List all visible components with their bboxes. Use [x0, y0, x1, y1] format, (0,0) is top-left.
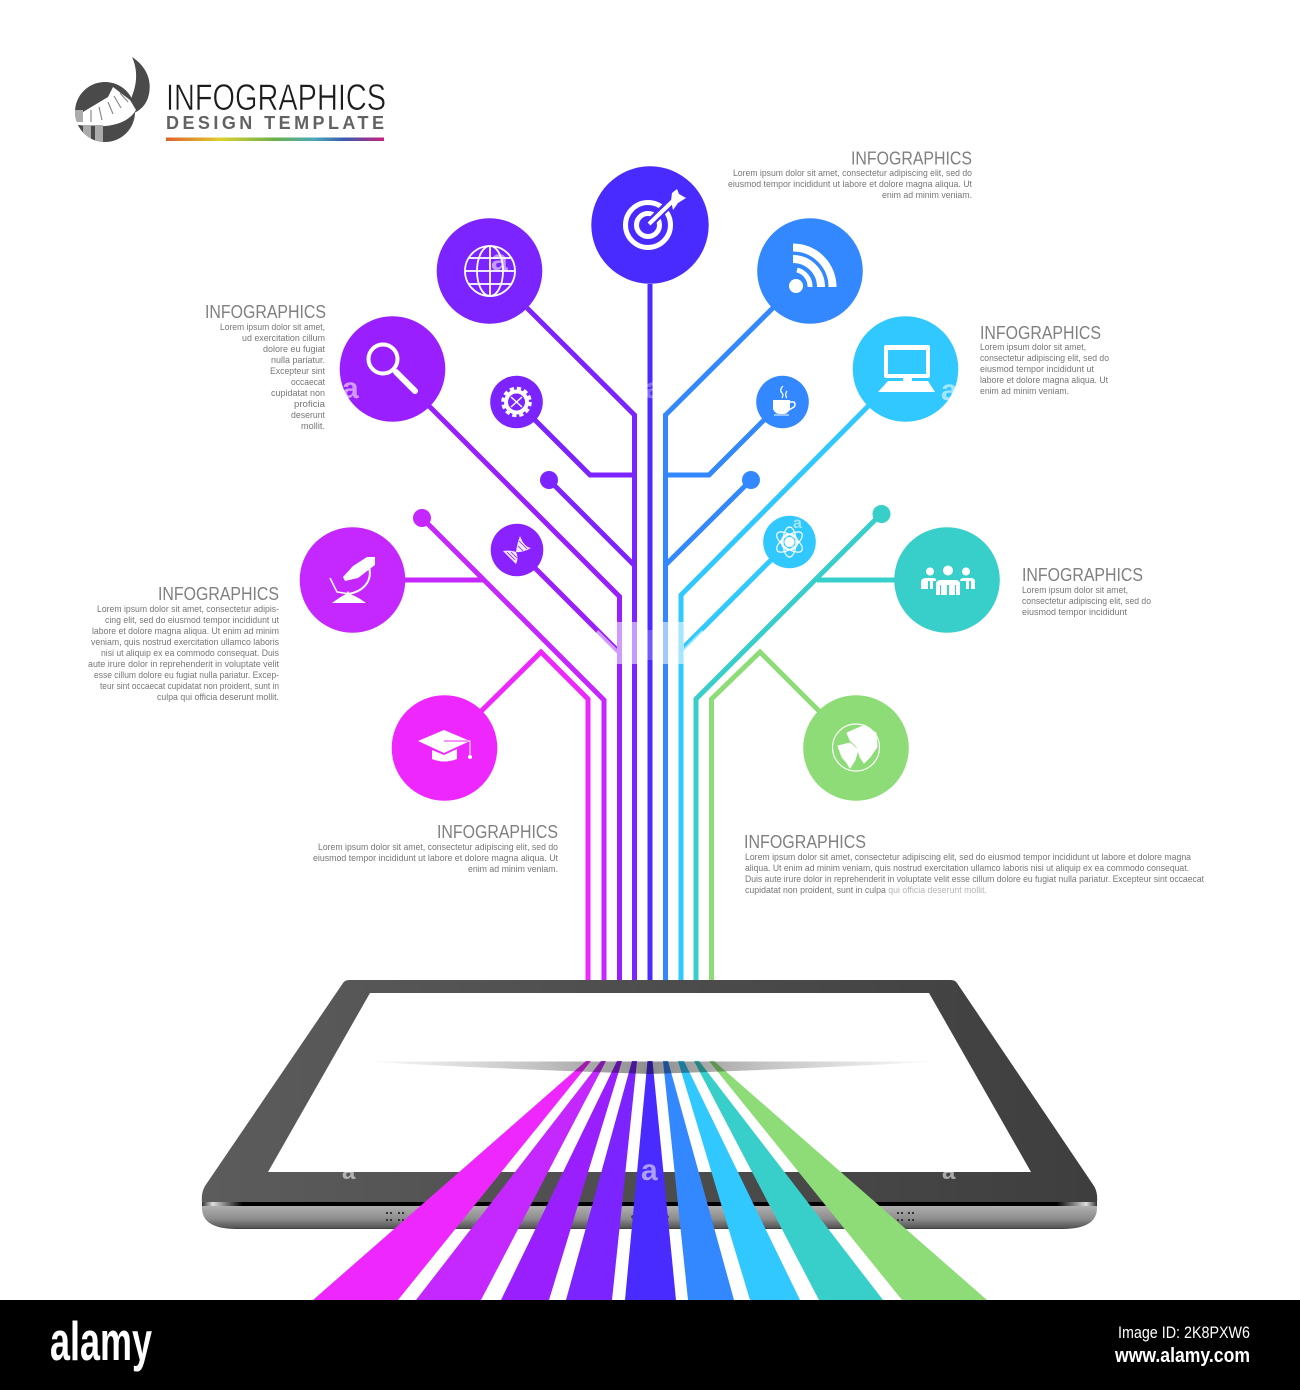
- icon: atom: [773, 527, 806, 557]
- dot: blue endpoint: [742, 471, 760, 489]
- text block: upper left: proficia: [294, 399, 326, 410]
- tablet bezel: [202, 980, 1097, 1202]
- node: target: [591, 166, 709, 284]
- node: earth: [803, 695, 909, 801]
- text block: lower right: Duis aute irure dolor in reprehenderit in voluptate velit esse cillum dolore eu fugiat nulla pariatur. Excepteur sint occaecat: [745, 874, 1204, 885]
- text block: lower right: Lorem ipsum dolor sit amet, consectetur adipiscing elit, sed do eiusmod tempor incididunt ut labore et dolore magna: [745, 852, 1192, 863]
- text block: upper left: mollit.: [301, 421, 325, 432]
- text block: lower right: cupidatat non proident, sunt in culpa qui officia deserunt mollit.: [745, 885, 987, 896]
- tablet screen: [268, 993, 1031, 1172]
- text block: middle right: [1022, 565, 1151, 618]
- icon: microscope: [330, 557, 375, 603]
- text block: top right: enim ad minim veniam.: [882, 190, 972, 201]
- text block: upper left: cupidatat non: [271, 388, 325, 399]
- watermark letters: a: [942, 1158, 956, 1185]
- dot: magenta endpoint: [413, 509, 431, 527]
- text block: upper left: INFOGRAPHICS: [205, 302, 326, 322]
- icon: target with arrow: [626, 189, 686, 248]
- logo subtitle: DESIGN TEMPLATE: [166, 113, 384, 133]
- icon: earth: [832, 724, 880, 771]
- text block: upper left: nulla pariatur.: [271, 355, 325, 366]
- text block: upper right: enim ad minim veniam.: [980, 386, 1069, 397]
- text block: middle left: aute irure dolor in reprehenderit in voluptate velit: [88, 659, 279, 670]
- icon: computer: [878, 345, 935, 392]
- node: globe grid: [437, 218, 542, 324]
- text block: lower left: INFOGRAPHICS: [437, 822, 558, 842]
- text block: upper left: deserunt: [291, 410, 325, 421]
- text block: upper left: Lorem ipsum dolor sit amet,: [220, 322, 325, 333]
- dot: violet endpoint: [540, 471, 558, 489]
- watermark letters: a: [645, 372, 662, 405]
- text block: top right: Lorem ipsum dolor sit amet, consectetur adipiscing elit, sed do: [733, 168, 972, 179]
- speaker dots: [386, 1212, 914, 1221]
- node: graduation: [392, 695, 497, 801]
- text block: top right: [728, 148, 972, 201]
- footer bar: [0, 1300, 1300, 1390]
- text block: middle left: nisi ut aliquip ex ea commodo consequat. Duis: [101, 648, 279, 659]
- text block: middle left: culpa qui officia deserunt mollit.: [157, 692, 279, 703]
- text block: lower left: eiusmod tempor incididunt ut labore et dolore magna aliqua. Ut: [313, 853, 558, 864]
- text block: middle left: [88, 584, 279, 703]
- tablet: [202, 980, 1097, 1229]
- icon: magnifier: [368, 344, 415, 391]
- tablet side edge: [202, 1204, 1097, 1229]
- icon: rss feed: [789, 248, 832, 293]
- text block: top right: eiusmod tempor incididunt ut labore et dolore magna aliqua. Ut: [728, 179, 972, 190]
- watermark letters: a: [491, 244, 508, 277]
- node: gear: [490, 376, 543, 428]
- text block: lower right: aliqua. Ut enim ad minim veniam, quis nostrud exercitation ullamco laboris nisi ut aliquip ex ea commodo consequat.: [745, 863, 1189, 874]
- text block: upper right: Lorem ipsum dolor sit amet,: [980, 342, 1086, 353]
- node: monitor: [853, 316, 958, 422]
- text block: upper right: consectetur adipiscing elit, sed do: [980, 353, 1109, 364]
- text block: middle left: teur sint occaecat cupidatat non proident, sunt in: [100, 681, 279, 692]
- text block: lower right: [744, 832, 1204, 896]
- perspective colour rays: [313, 1061, 987, 1300]
- text block: upper left: dolore eu fugiat: [263, 344, 325, 355]
- dot: teal endpoint: [872, 505, 890, 523]
- footer logo: alamy: [50, 1310, 152, 1372]
- watermark letters: a: [641, 1154, 658, 1187]
- text block: middle left: esse cillum dolore eu fugiat nulla pariatur. Excep-: [94, 670, 279, 681]
- text block: middle left: labore et dolore magna aliqua. Ut enim ad minim: [92, 626, 279, 637]
- icon: coffee cup: [773, 386, 795, 416]
- node: dna: [491, 524, 543, 576]
- circuit tree lines: [352, 271, 947, 980]
- icon: wireframe globe: [465, 246, 515, 296]
- watermark letters: a: [941, 374, 958, 407]
- text block: middle left: veniam, quis nostrud exercitation ullamco laboris: [91, 637, 279, 648]
- icon: people: [921, 566, 975, 595]
- text block: top right: INFOGRAPHICS: [851, 148, 972, 168]
- logo title: INFOGRAPHICS: [166, 77, 386, 118]
- watermark letters: a: [793, 515, 802, 532]
- image id: Image ID: 2K8PXW6: [1118, 1323, 1250, 1342]
- text block: lower left: Lorem ipsum dolor sit amet, consectetur adipiscing elit, sed do: [318, 842, 558, 853]
- text block: middle left: cing elit, sed do eiusmod tempor incididunt ut: [105, 615, 279, 626]
- logo: [67, 57, 386, 142]
- text block: upper left: ud exercitation cillum: [242, 333, 325, 344]
- watermark band over lines: [596, 622, 704, 664]
- text block: middle right: consectetur adipiscing elit, sed do: [1022, 596, 1151, 607]
- node: coffee: [756, 376, 809, 428]
- text block: middle right: eiusmod tempor incididunt: [1022, 607, 1127, 618]
- node: rss: [757, 218, 863, 324]
- text block: middle left: INFOGRAPHICS: [158, 584, 279, 604]
- icon: gear: [504, 389, 530, 415]
- node: atom: [763, 516, 816, 568]
- node: microscope: [300, 527, 405, 633]
- text block: upper left: [205, 302, 326, 432]
- text block: lower left: [313, 822, 558, 875]
- node: search: [340, 316, 445, 422]
- screen shadow: [360, 1062, 940, 1074]
- text block: lower right: INFOGRAPHICS: [744, 832, 866, 852]
- text block: middle right: Lorem ipsum dolor sit amet,: [1022, 585, 1128, 596]
- icon: graduation cap: [418, 730, 472, 762]
- text block: upper left: occaecat: [291, 377, 325, 388]
- tablet edge highlight: [202, 1201, 1097, 1206]
- rainbow underline: [166, 138, 384, 141]
- watermark letters: a: [342, 1158, 356, 1185]
- text block: upper right: eiusmod tempor incididunt ut: [980, 364, 1094, 375]
- text block: middle left: Lorem ipsum dolor sit amet, consectetur adipis-: [97, 604, 279, 615]
- text block: upper left: Excepteur sint: [270, 366, 325, 377]
- watermark letters: [342, 244, 958, 1187]
- node: team: [894, 527, 1000, 633]
- text block: upper right: [980, 323, 1109, 397]
- website: www.alamy.com: [1114, 1345, 1250, 1367]
- text block: upper right: labore et dolore magna aliqua. Ut: [980, 375, 1108, 386]
- text block: middle right: INFOGRAPHICS: [1022, 565, 1143, 585]
- text block: upper right: INFOGRAPHICS: [980, 323, 1101, 343]
- watermark letters: a: [342, 372, 359, 405]
- logo mark: [67, 57, 150, 142]
- home button: [631, 1212, 669, 1222]
- text block: lower left: enim ad minim veniam.: [468, 864, 558, 875]
- icon: dna helix: [503, 536, 531, 564]
